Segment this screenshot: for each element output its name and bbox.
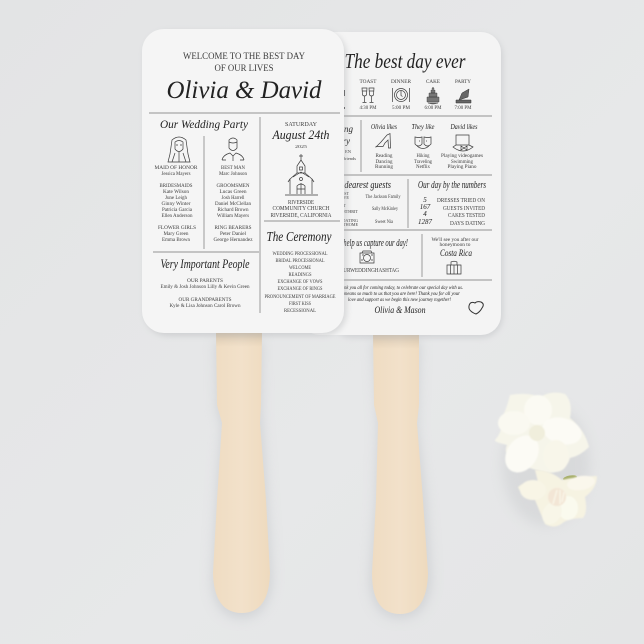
groom side list: Richard Brown xyxy=(218,208,249,213)
flower shadow xyxy=(502,402,590,526)
likes lists: Swimming xyxy=(451,160,474,165)
icon: church xyxy=(285,154,318,195)
hashtag: #OURWEDDINGHASHTAG xyxy=(337,268,400,274)
panel: left fan xyxy=(142,29,347,336)
welcome heading: OF OUR LIVES xyxy=(214,63,274,73)
guests list: The Jackson Family xyxy=(366,195,401,200)
number labels: DRESSES TRIED ON xyxy=(437,198,486,204)
thank you message: It means so much to us that you are here! Thank you for all your xyxy=(339,290,461,297)
divider lines on right fan xyxy=(340,116,492,280)
ceremony order: READINGS xyxy=(288,273,312,278)
flower: leaf xyxy=(563,474,577,482)
icon: champagne glasses xyxy=(362,88,374,102)
number values xyxy=(418,196,432,226)
groom side list: Daniel McClellan xyxy=(215,202,252,207)
parents and grandparents xyxy=(160,278,250,309)
number values: 167 xyxy=(420,203,431,211)
venue: RIVERSIDE, CALIFORNIA xyxy=(270,213,332,219)
likes lists: Running xyxy=(375,165,394,170)
guests list: ARTHRIT xyxy=(340,209,358,214)
likes headings xyxy=(371,123,478,131)
handle: right fan xyxy=(372,330,428,614)
groom side list: Lucas Green xyxy=(220,190,247,195)
section: date and venue xyxy=(270,122,332,219)
timeline labels: PARTY xyxy=(455,80,471,85)
bride side list xyxy=(154,166,198,243)
destination: Costa Rica xyxy=(440,248,472,258)
timeline labels: TOAST xyxy=(360,80,376,85)
timeline of the day xyxy=(344,80,472,111)
timeline labels: 4:30 PM xyxy=(360,106,377,111)
timeline labels: 7:00 PM xyxy=(454,106,472,111)
guests list: Sally McKinley xyxy=(372,207,398,212)
partly hidden block: ing xyxy=(341,124,353,134)
heading: wedding party: Our Wedding Party xyxy=(160,117,249,131)
likes headings: Olivia likes xyxy=(371,123,397,131)
ceremony order: FIRST KISS xyxy=(289,302,311,307)
groom side list: RING BEARERS xyxy=(214,226,252,231)
icon: camera xyxy=(360,251,374,263)
likes headings: David likes xyxy=(450,123,478,131)
number values: 5 xyxy=(423,196,427,204)
likes lists: Traveling xyxy=(414,160,433,165)
bride side list: June Leigh xyxy=(165,196,187,201)
section: very important people xyxy=(160,256,250,309)
icon: wedding cake xyxy=(427,88,439,104)
icon: high heel shoe xyxy=(376,134,390,148)
icon: heart xyxy=(469,302,483,314)
heading: the ceremony: The Ceremony xyxy=(266,230,332,245)
section: honeymoon xyxy=(432,236,479,274)
ceremony order: PRONOUNCEMENT OF MARRIAGE xyxy=(264,295,336,300)
date: SATURDAY xyxy=(285,122,318,128)
groom side list: GROOMSMEN xyxy=(216,184,250,189)
ceremony order xyxy=(264,252,336,314)
left fan card xyxy=(142,29,347,336)
partly hidden block: EN xyxy=(345,149,352,154)
divider lines on left fan xyxy=(149,113,340,313)
timeline labels: 5:00 PM xyxy=(392,106,411,111)
ceremony order: RECESSIONAL xyxy=(284,309,316,314)
icon: gramophone xyxy=(456,89,471,103)
flower: lower xyxy=(518,470,597,528)
parents and grandparents: OUR GRANDPARENTS xyxy=(178,297,232,303)
section: numbers xyxy=(418,180,486,227)
number labels xyxy=(437,198,486,227)
couple names: Olivia & David xyxy=(166,77,322,104)
guests list: Sweet Nia xyxy=(375,220,394,225)
date: 2025 xyxy=(295,144,308,149)
heading: very important people: Very Important People xyxy=(160,256,250,271)
date: August 24th xyxy=(272,127,330,142)
likes lists xyxy=(375,154,483,170)
parents and grandparents: Kyle & Lisa Johnson Carol Brown xyxy=(170,303,241,309)
ceremony order: WELCOME xyxy=(289,266,311,271)
icon: luggage xyxy=(447,261,461,274)
partly hidden block: ry xyxy=(342,136,350,146)
groom side list: George Hernandez xyxy=(214,238,253,243)
groom side list: William Mayers xyxy=(217,214,249,219)
welcome heading xyxy=(183,51,305,73)
bride side list: FLOWER GIRLS xyxy=(158,226,196,231)
section: likes xyxy=(371,123,483,170)
number labels: DAYS DATING xyxy=(450,221,486,227)
groom side list: Peter Daniel xyxy=(220,232,247,237)
welcome heading: WELCOME TO THE BEST DAY xyxy=(183,51,305,61)
heading: the best day ever: The best day ever xyxy=(344,49,466,73)
groom side list: Marc Johnson xyxy=(219,172,247,177)
number labels: GUESTS INVITED xyxy=(443,206,486,212)
icon: theatre masks xyxy=(415,137,431,148)
signature: Olivia & Mason xyxy=(374,305,426,315)
right fan card xyxy=(300,32,503,338)
likes lists: Playing Piano xyxy=(448,165,477,170)
thank you message xyxy=(337,284,463,315)
guests list: ST xyxy=(344,191,349,196)
bride side list: Emma Brown xyxy=(162,238,190,243)
venue xyxy=(270,200,332,219)
section: wedding party xyxy=(154,117,253,243)
likes lists: Reading xyxy=(376,154,393,159)
shadows of handles xyxy=(212,340,431,618)
section: honeymoon: honeymoon to xyxy=(440,242,471,248)
partial column peeking from under left fan xyxy=(344,90,345,109)
ceremony order: EXCHANGE OF RINGS xyxy=(278,287,323,292)
venue: RIVERSIDE xyxy=(288,200,314,206)
guests list: EST xyxy=(339,203,346,208)
bride side list: BRIDESMAIDS xyxy=(160,184,193,189)
bride side list: Ginny Winter xyxy=(162,202,191,207)
heading: dearest guests: Our dearest guests xyxy=(329,179,391,191)
heading: numbers: Our day by the numbers xyxy=(418,180,486,191)
number labels: CAKES TESTED xyxy=(448,213,486,219)
thank you message: Thank you all for coming today, to celebrate our special day with us. xyxy=(337,284,463,291)
number values: 1287 xyxy=(418,218,432,226)
flowers xyxy=(495,393,597,528)
bride side list: Patricia Garcia xyxy=(162,208,193,213)
likes lists: Dancing xyxy=(376,160,393,165)
guests list xyxy=(339,191,401,227)
flower: upper xyxy=(495,393,589,479)
likes lists: Hiking xyxy=(416,154,430,159)
venue: COMMUNITY CHURCH xyxy=(272,206,330,212)
guests list: THOME xyxy=(343,222,358,227)
timeline labels xyxy=(360,80,472,111)
likes lists: Netflix xyxy=(416,165,431,170)
section: hashtag xyxy=(323,238,408,274)
timeline labels: 6:00 PM xyxy=(424,106,442,111)
heading: capture: Please help us capture our day! xyxy=(323,238,408,249)
parents and grandparents: Emily & Josh Johnson Lilly & Kevin Green xyxy=(160,284,250,290)
bride side list: Mary Green xyxy=(164,232,189,237)
thank you message: love and support as we begin this new journey together! xyxy=(348,297,451,303)
likes lists: Playing videogames xyxy=(441,154,483,159)
groom side list: Josh Harrell xyxy=(222,196,245,201)
timeline labels: DINNER xyxy=(391,80,412,85)
ceremony order: EXCHANGE OF VOWS xyxy=(278,280,323,285)
honeymoon text: We'll see you after our xyxy=(432,236,479,243)
number values: 4 xyxy=(423,210,427,218)
timeline labels: CAKE xyxy=(426,80,440,85)
partly hidden block xyxy=(341,124,356,161)
section: the ceremony xyxy=(264,230,336,314)
bride side list: Ellen Anderson xyxy=(162,214,193,219)
guests list: RIVE xyxy=(339,195,349,200)
section: dearest guests xyxy=(329,179,401,227)
groom side list xyxy=(214,166,253,243)
bride side list: Kate Wilson xyxy=(163,190,190,195)
likes headings: They like xyxy=(412,123,434,131)
icon: dinner plate xyxy=(392,88,410,102)
icon: top hat xyxy=(453,135,473,151)
parents and grandparents: OUR PARENTS xyxy=(187,278,223,284)
guests list: DATING xyxy=(342,218,358,223)
handle: left fan xyxy=(213,330,270,613)
bride side list: MAID OF HONOR xyxy=(154,166,198,171)
icon: bride xyxy=(168,137,190,162)
panel: right fan xyxy=(300,32,503,338)
groom side list: BEST MAN xyxy=(221,166,245,171)
bride side list: Jessica Mayers xyxy=(162,172,191,177)
ceremony order: WEDDING PROCESSIONAL xyxy=(272,252,328,257)
partly hidden block: friends xyxy=(344,156,356,161)
date xyxy=(272,122,330,149)
icon: groom xyxy=(222,138,244,161)
ceremony order: BRIDAL PROCESSIONAL xyxy=(276,259,324,264)
